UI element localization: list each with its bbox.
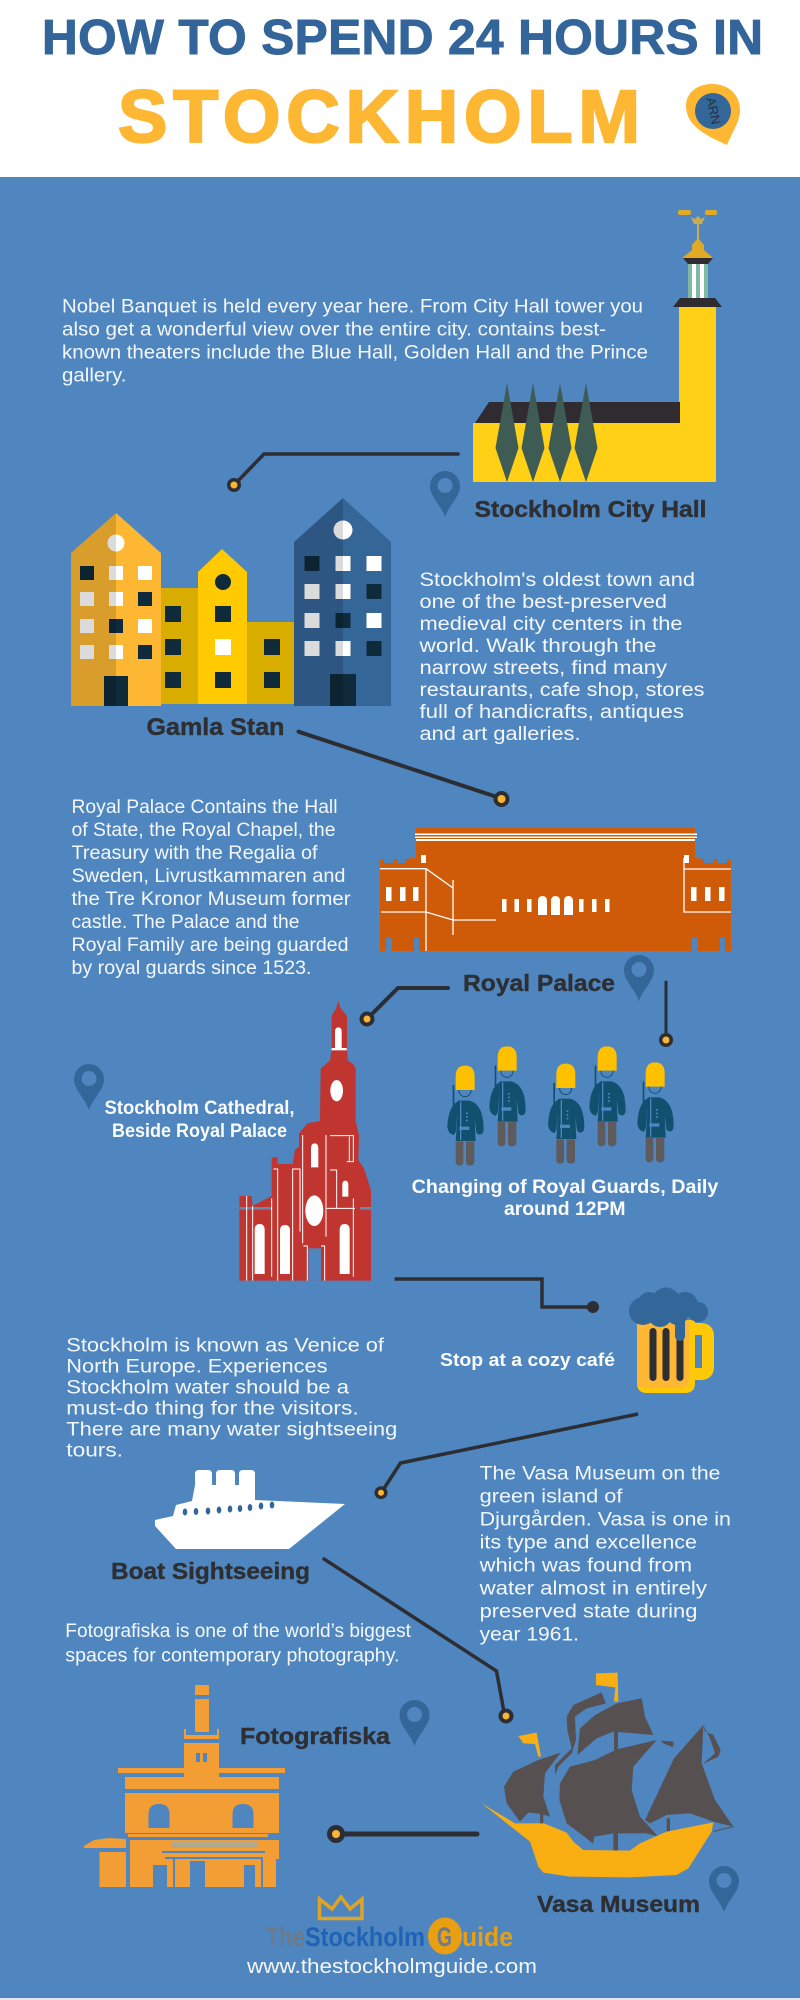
connector: boat to Vasa — [324, 1559, 514, 1724]
text: Royal Palace description: Royal Family are being guarded — [72, 935, 348, 956]
label: Vasa Museum: Vasa Museum — [537, 1891, 700, 1917]
guard 5 — [637, 1062, 674, 1162]
connector: Gamla Stan to palace — [298, 732, 510, 807]
text: Vasa description: Djurgården. Vasa is one in — [480, 1510, 731, 1531]
connector: palace to cathedral — [360, 988, 448, 1026]
illustration: Stockholm Cathedral — [239, 1001, 371, 1281]
text: boat description: tours. — [66, 1441, 123, 1462]
text: boat description: There are many water sightseeing — [66, 1420, 397, 1441]
text: boat description: Stockholm water should be a — [66, 1378, 349, 1399]
text: Royal Palace description: the Tre Kronor Museum former — [72, 889, 351, 910]
text: Gamla Stan description: full of handicrafts, antiques — [420, 702, 684, 723]
text: Gamla Stan description: medieval city centers in the — [420, 614, 682, 635]
illustration: Stockholm City Hall — [473, 210, 722, 482]
text: Fotografiska description — [65, 1621, 412, 1667]
connector: city hall — [227, 454, 458, 492]
label: Changing of Royal Guards: around 12PM — [504, 1199, 626, 1220]
text: Gamla Stan description: and art galleries. — [420, 724, 580, 745]
text: city hall description: known theaters include the Blue Hall, Golden Hall and the Prince — [62, 342, 648, 364]
text: Royal Palace description: Treasury with the Regalia of — [72, 843, 318, 864]
connector: cathedral to cafe — [394, 1279, 599, 1313]
text: Royal Palace description: of State, the Royal Chapel, the — [72, 820, 336, 841]
illustration: Fotografiska building — [84, 1685, 285, 1887]
text: Vasa description — [478, 1464, 731, 1646]
text: Vasa description: The Vasa Museum on the — [480, 1464, 720, 1485]
bottom edge — [0, 1998, 800, 2000]
text: Gamla Stan description: restaurants, cafe shop, stores — [420, 680, 704, 701]
header panel — [0, 0, 800, 177]
label: Fotografiska: Fotografiska — [240, 1723, 390, 1749]
illustration: sightseeing boat — [155, 1470, 345, 1549]
text: Gamla Stan description: one of the best-preserved — [420, 592, 667, 613]
text: Vasa description: preserved state during — [480, 1602, 697, 1623]
text: city hall description: gallery. — [62, 366, 126, 386]
title line 2: STOCKHOLM — [118, 75, 640, 158]
label: Stockholm Cathedral: Stockholm Cathedral, — [104, 1098, 294, 1119]
guard 3 — [548, 1064, 584, 1164]
footer logo — [266, 1897, 513, 1954]
text: Vasa description: its type and excellence — [480, 1533, 697, 1554]
logo circle — [428, 1918, 462, 1954]
illustration: royal guards — [447, 1046, 674, 1166]
icon: crown — [320, 1897, 362, 1918]
label: Stockholm Cathedral: Beside Royal Palace — [112, 1121, 287, 1142]
logo letter: G: G — [437, 1922, 452, 1952]
text: Gamla Stan description: narrow streets, find many — [420, 658, 668, 679]
text: boat description — [66, 1336, 397, 1462]
icon: header location pin — [686, 84, 740, 145]
text: boat description: Stockholm is known as Venice of — [66, 1336, 385, 1357]
illustration: Vasa ship — [482, 1673, 733, 1877]
connector: cafe to boat — [374, 1414, 638, 1499]
text: Royal Palace description: Sweden, Livrustkammaren and — [72, 866, 346, 887]
illustration: Gamla Stan buildings — [71, 498, 391, 706]
text: Gamla Stan description — [418, 570, 704, 745]
text: Gamla Stan description: world. Walk through the — [418, 636, 656, 657]
label: Stockholm City Hall: Stockholm City Hall — [474, 496, 706, 522]
text: Fotografiska description: Fotografiska is one of the world’s biggest — [65, 1621, 412, 1642]
guard 2 — [489, 1046, 526, 1146]
text: Royal Palace description: by royal guards since 1523. — [72, 958, 312, 979]
icon: header location pin: ARN — [703, 96, 724, 126]
icon: pin city hall — [430, 471, 460, 517]
label: Changing of Royal Guards: Changing of Royal Guards, Daily — [412, 1177, 719, 1198]
footer URL: www.thestockholmguide.com — [246, 1956, 537, 1978]
text: city hall description: Nobel Banquet is held every year here. From City Hall tower you — [62, 296, 643, 318]
text: Royal Palace description: Royal Palace Contains the Hall — [72, 797, 338, 818]
icon: beer mug — [629, 1288, 708, 1393]
connector: Fotografiska to Vasa — [327, 1825, 477, 1843]
text: Royal Palace description — [72, 797, 351, 979]
text: Vasa description: which was found from — [478, 1556, 692, 1577]
text: boat description: must-do thing for the visitors. — [66, 1399, 359, 1420]
logo word: uide: uide — [462, 1922, 513, 1952]
label: Stockholm Cathedral — [104, 1098, 294, 1142]
connector: palace to guards — [659, 982, 673, 1047]
label: Boat Sightseeing: Boat Sightseeing — [111, 1558, 310, 1584]
label: Royal Palace: Royal Palace — [463, 970, 615, 996]
icon: pin Fotografiska — [400, 1700, 430, 1746]
text: Vasa description: year 1961. — [480, 1625, 579, 1646]
label: Gamla Stan: Gamla Stan — [146, 714, 284, 741]
label: Stop at a cozy cafe: Stop at a cozy café — [440, 1350, 615, 1370]
text: Vasa description: green island of — [480, 1487, 623, 1508]
text: city hall description: also get a wonderful view over the entire city. contains best- — [62, 320, 606, 340]
icon: pin palace — [624, 955, 654, 1001]
icon: pin cathedral — [74, 1064, 104, 1110]
illustration: Royal Palace — [380, 828, 731, 951]
icon: pin Vasa — [709, 1866, 739, 1912]
label: Changing of Royal Guards — [412, 1177, 719, 1220]
text: Vasa description: water almost in entirely — [478, 1579, 708, 1600]
guard 4 — [589, 1046, 626, 1146]
title line 1: HOW TO SPEND 24 HOURS IN — [42, 10, 763, 65]
text: Fotografiska description: spaces for contemporary photography. — [65, 1646, 400, 1667]
text: Gamla Stan description: Stockholm's oldest town and — [420, 570, 695, 591]
text: city hall description — [62, 296, 648, 386]
guard 1 — [447, 1066, 484, 1166]
text: Royal Palace description: castle. The Palace and the — [72, 912, 300, 933]
text: boat description: North Europe. Experiences — [66, 1357, 328, 1378]
logo word: The: The — [266, 1922, 305, 1952]
logo word: Stockholm: Stockholm — [305, 1922, 425, 1952]
